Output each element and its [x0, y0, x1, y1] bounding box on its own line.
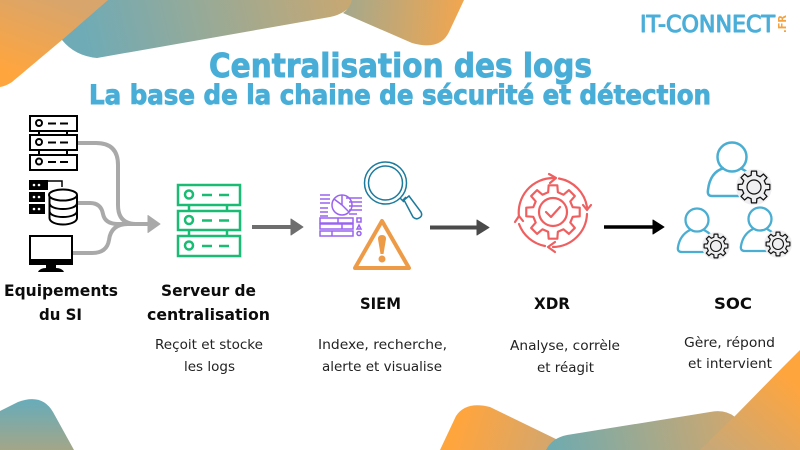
- background shape: top teal band: [55, 0, 356, 58]
- person: bottom left: [678, 208, 730, 260]
- arrows: devices to server: [73, 143, 160, 253]
- description: SIEM: [318, 337, 447, 375]
- description: server: les logs: [184, 359, 235, 375]
- arrow: SIEM to XDR: [430, 220, 489, 235]
- person: bottom right: [741, 208, 792, 258]
- label: Serveur de centralisation: Serveur de: [161, 281, 256, 300]
- label: SIEM: SIEM: [360, 294, 401, 313]
- description: SOC: Gère, répond: [684, 335, 775, 351]
- icon: monitor: [29, 236, 73, 272]
- description: XDR: et réagit: [537, 360, 594, 376]
- background shape: top left orange: [0, 0, 108, 87]
- title: [89, 46, 711, 111]
- background shape: bottom orange: [440, 405, 560, 450]
- label: Serveur de centralisation: centralisation: [147, 305, 270, 324]
- description: XDR: Analyse, corrèle: [510, 338, 620, 354]
- description: XDR: [510, 338, 620, 376]
- description: server: Reçoit et stocke: [155, 337, 263, 353]
- description: SIEM: Indexe, recherche,: [318, 337, 447, 353]
- icon: magnifier: [364, 162, 422, 219]
- label: Serveur de centralisation: [147, 281, 270, 324]
- background shape: bottom left teal: [0, 399, 74, 450]
- icon: SOC team: [678, 142, 792, 260]
- background shape: top right band: [343, 0, 464, 45]
- arrow: XDR to SOC: [604, 220, 664, 234]
- icon: red gear with check: [515, 174, 591, 252]
- background shape: bottom right orange: [700, 350, 800, 450]
- label: Equipements du SI: [4, 281, 118, 324]
- title: Centralisation des logs: [209, 46, 592, 85]
- label: Equipements du SI: Equipements: [4, 281, 118, 300]
- description: server: [155, 337, 263, 375]
- arrow: server to SIEM: [252, 219, 303, 235]
- logo: .FR: [777, 15, 789, 33]
- description: SIEM: alerte et visualise: [322, 359, 442, 375]
- person: top: [708, 142, 772, 205]
- icon: warning triangle: [355, 221, 409, 268]
- icon: green server: [178, 185, 240, 256]
- icon: database: [29, 180, 77, 224]
- label: XDR: XDR: [534, 294, 570, 313]
- logo: IT-CONNECT: [640, 12, 776, 38]
- label: Equipements du SI: du SI: [39, 305, 82, 324]
- background shape: bottom teal band: [546, 411, 745, 450]
- description: SOC: [684, 335, 775, 372]
- label: SOC: SOC: [714, 294, 752, 313]
- icon: purple report chart: [320, 195, 362, 236]
- title: La base de la chaine de sécurité et détection: [89, 80, 711, 111]
- description: SOC: et intervient: [688, 356, 772, 372]
- icon: black server rack: [30, 116, 77, 170]
